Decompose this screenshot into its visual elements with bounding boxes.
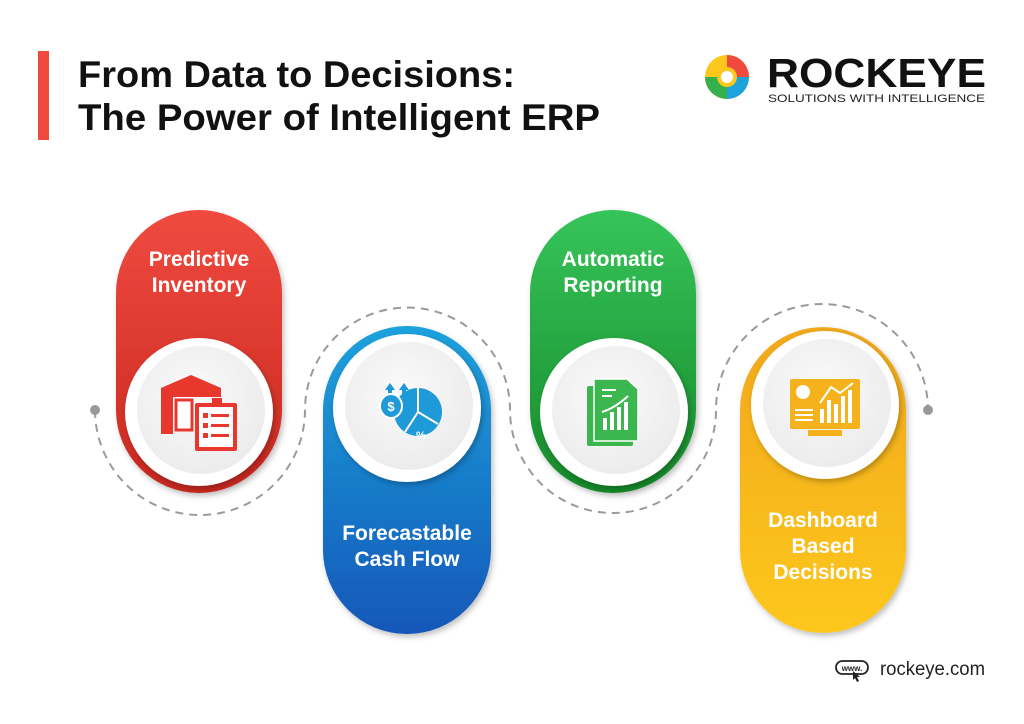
- title: [78, 54, 600, 138]
- panel: dashboard based decisions: Decisions: [773, 561, 873, 584]
- logo: ROCKEYE: [767, 50, 986, 96]
- panel: dashboard based decisions: [740, 327, 906, 633]
- logo: SOLUTIONS WITH INTELLIGENCE: [768, 93, 985, 105]
- icon: monitor dashboard: [790, 379, 860, 436]
- footer: website: rockeye.com: [880, 659, 985, 680]
- connector end dots: [90, 405, 100, 415]
- panel: forecastable cash flow: Cash Flow: [354, 548, 460, 571]
- panel: dashboard based decisions: Based: [791, 535, 855, 558]
- icon: www: www.: [841, 664, 862, 673]
- footer: website: [836, 659, 985, 682]
- icon: report document: [587, 379, 638, 446]
- icon: money bag pie chart: [380, 383, 442, 442]
- panel: automatic reporting: Automatic: [562, 248, 665, 271]
- panel: automatic reporting: [530, 210, 696, 493]
- title: From Data to Decisions:: [78, 54, 515, 95]
- icon: money bag pie chart: %: [416, 430, 426, 442]
- icon: money bag pie chart: $: [387, 399, 395, 414]
- icon: warehouse clipboard: [161, 375, 237, 451]
- title: The Power of Intelligent ERP: [78, 97, 600, 138]
- panel: predictive inventory: [116, 210, 282, 493]
- panel: automatic reporting: Reporting: [563, 274, 663, 297]
- panel: predictive inventory: Inventory: [152, 274, 247, 297]
- panel: forecastable cash flow: Forecastable: [342, 522, 472, 545]
- dashed connector path: [95, 304, 928, 515]
- panel: predictive inventory: Predictive: [149, 248, 249, 271]
- panel: forecastable cash flow: [323, 326, 491, 634]
- title accent bar: [38, 51, 49, 140]
- logo: [705, 50, 986, 105]
- panel: dashboard based decisions: Dashboard: [768, 509, 878, 532]
- icon: www: [836, 661, 868, 682]
- icon: logo swirl: [705, 55, 749, 99]
